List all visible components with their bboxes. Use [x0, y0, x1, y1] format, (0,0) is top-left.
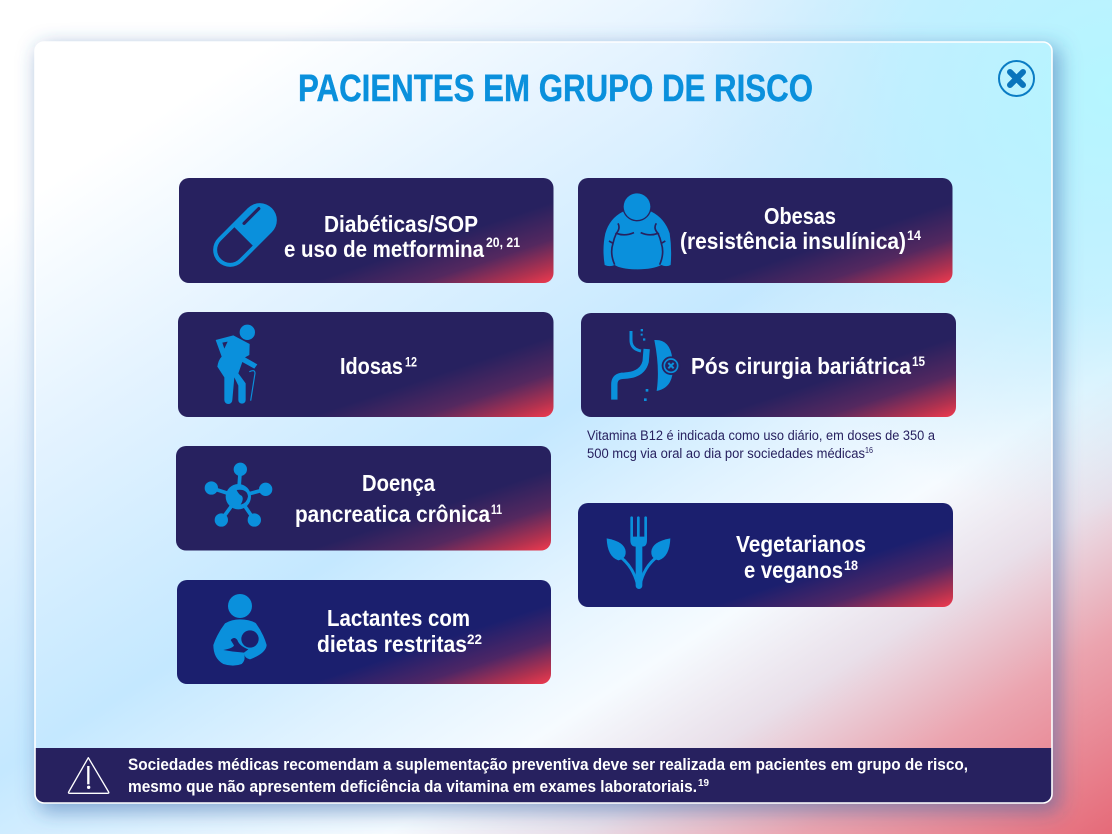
card: Obesas: [578, 178, 952, 283]
icon: pancreas network: [205, 463, 272, 527]
footer text: 19: [698, 778, 709, 789]
note: vitamin B12 dose: 500 mcg via oral ao dia por sociedades médicas: [587, 446, 865, 461]
label: Diabéticas/SOP: [324, 211, 478, 237]
icon: obese person: [603, 192, 671, 269]
label: e veganos: [744, 557, 843, 583]
title: PACIENTES EM GRUPO DE RISCO: [298, 68, 813, 110]
label: Idosas: [340, 353, 403, 379]
label: 14: [907, 227, 921, 243]
label: e uso de metformina: [284, 236, 485, 262]
label: 18: [844, 557, 858, 573]
note: vitamin B12 dose: Vitamina B12 é indicada como uso diário, em doses de 350 a: [587, 428, 935, 443]
icon: fork and leaves: [607, 516, 670, 589]
footer banner: [35, 748, 1052, 803]
label: Obesas: [764, 203, 836, 229]
icon: bariatric stomach: [614, 329, 680, 401]
label: pancreatica crônica: [295, 501, 491, 527]
label: Vegetarianos: [736, 531, 866, 557]
label: Pós cirurgia bariátrica: [691, 353, 912, 379]
label: dietas restritas: [317, 631, 467, 657]
label: [736, 531, 866, 583]
note: vitamin B12 dose: 16: [865, 446, 873, 455]
label: 20, 21: [486, 234, 520, 250]
footer text: Sociedades médicas recomendam a suplementação preventiva deve ser realizada em pacientes em grupo de risco,: [128, 756, 968, 774]
label: [284, 211, 520, 262]
icon: warning triangle: [68, 758, 109, 793]
card: Doença pancreatica crônica: [176, 446, 551, 550]
label: 15: [912, 353, 925, 369]
icon: capsule: [206, 196, 284, 274]
card: Diabéticas/SOP: [179, 178, 554, 283]
icon: close button: [999, 61, 1034, 96]
label: Lactantes com: [327, 605, 470, 631]
label: (resistência insulínica): [680, 228, 906, 254]
card: Pós cirurgia bariátrica: [581, 313, 956, 417]
card: Idosas: [178, 312, 554, 417]
icon: breastfeeding mother: [213, 594, 267, 666]
label: 12: [405, 354, 417, 370]
icon: elderly woman with cane: [216, 325, 257, 404]
footer text: mesmo que não apresentem deficiência da vitamina em exames laboratoriais.: [128, 778, 697, 796]
label: Doença: [362, 470, 436, 496]
label: 11: [491, 501, 502, 517]
label: [680, 203, 921, 254]
label: [295, 470, 502, 527]
note: vitamin B12 dose: [587, 428, 935, 461]
card: Lactantes: [177, 580, 551, 684]
footer text: [128, 756, 968, 796]
label: 22: [467, 631, 482, 647]
label: [317, 605, 482, 657]
card: Vegetarianos: [578, 503, 953, 607]
